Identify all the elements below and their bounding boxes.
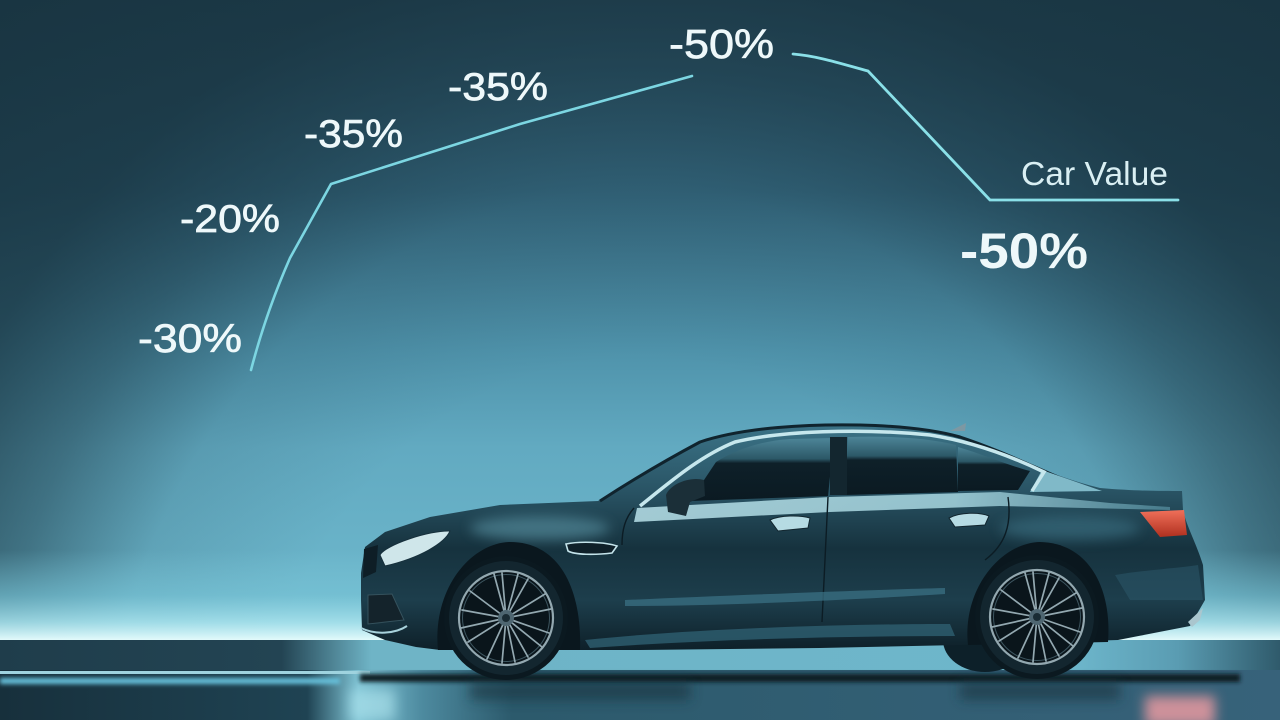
- car: [361, 423, 1205, 680]
- pillar: [830, 437, 847, 495]
- value line chart: [251, 54, 1178, 370]
- side vent: [566, 542, 617, 554]
- label: -35% upper: -35%: [448, 66, 548, 109]
- rear wheel: [975, 555, 1099, 679]
- label: -20%: -20%: [180, 198, 280, 241]
- roof dark top edge: [600, 425, 1070, 501]
- fog lamp: [368, 594, 404, 624]
- rear fender shading: [1115, 565, 1203, 600]
- rear wheel arch: [967, 542, 1108, 645]
- crease highlight: [625, 588, 945, 606]
- label: -50% final: -50%: [960, 223, 1088, 279]
- label: -50% peak: -50%: [669, 21, 774, 67]
- grille: [363, 545, 378, 578]
- falling line segment: [793, 54, 1178, 200]
- front wheel: [444, 556, 568, 680]
- roof antenna: [950, 423, 966, 431]
- front lip chrome: [361, 626, 407, 633]
- label: -30%: -30%: [138, 317, 242, 361]
- floor: [0, 640, 1280, 720]
- front wheel arch: [437, 542, 580, 650]
- rear exhaust: [1188, 608, 1203, 627]
- chrome roof trim: [640, 431, 1044, 506]
- car body: [361, 425, 1205, 650]
- belt highlight: [634, 492, 1170, 522]
- door seams: [622, 497, 1009, 622]
- sill highlight: [585, 624, 955, 648]
- mirror: [666, 479, 705, 516]
- label: Car Value: Car Value: [1021, 155, 1168, 192]
- front door handle: [770, 516, 810, 531]
- rear door handle: [949, 513, 989, 527]
- rising line segment: [251, 76, 692, 370]
- quarter panel light: [1030, 470, 1102, 492]
- fender highlight: [470, 516, 610, 540]
- rear window: [958, 447, 1030, 491]
- headlight: [380, 531, 450, 566]
- rear door highlight: [1000, 516, 1140, 540]
- tail light: [1140, 510, 1187, 537]
- middle window: [845, 437, 958, 495]
- front window: [690, 438, 834, 501]
- rear far tyre: [943, 608, 1027, 672]
- label: -35% lower: -35%: [304, 113, 403, 156]
